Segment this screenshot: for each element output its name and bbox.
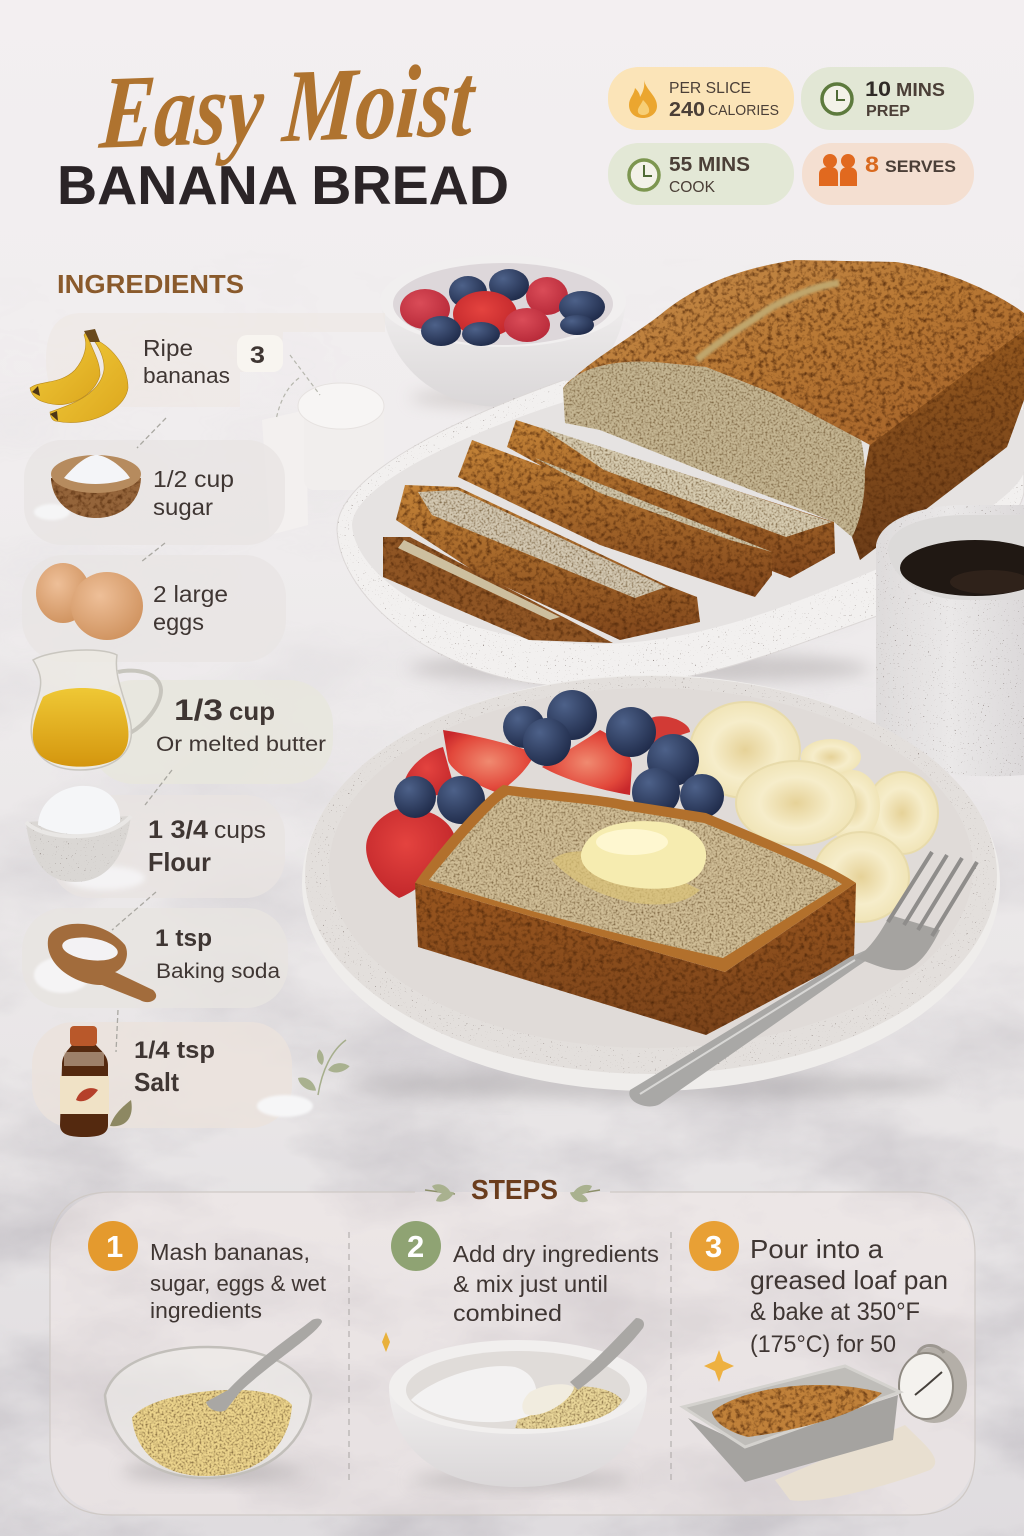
ingredient: bananas [30, 313, 385, 423]
step 2: 2 [407, 1229, 424, 1264]
ingredient: oil: 1/3 [174, 694, 223, 727]
coffee mug [876, 505, 1024, 776]
title main line: BANANA BREAD [57, 154, 509, 216]
badge: calories: 240 [669, 99, 705, 121]
ingredient: flour: 1 3/4 [148, 816, 208, 844]
step 3 [683, 1221, 967, 1501]
banana slices [690, 702, 938, 922]
ingredient: oil [31, 650, 333, 784]
slice 2 [458, 440, 772, 597]
clock [899, 1346, 967, 1423]
ingredient: baking soda: 1 tsp [155, 925, 212, 952]
stat badges [608, 67, 974, 205]
badge: cook time: COOK [669, 179, 715, 196]
step 1 [88, 1221, 326, 1482]
dashed connectors [112, 418, 172, 1052]
slice 4 [383, 537, 613, 643]
step 1: sugar, eggs & wet [150, 1271, 326, 1296]
fork [629, 852, 977, 1106]
step 1: 1 [106, 1229, 123, 1264]
badge: serves [802, 143, 974, 205]
steps heading [425, 1174, 600, 1205]
badge: prep time: MINS [896, 80, 945, 100]
steps section [50, 1174, 975, 1515]
ingredient: oil: Or melted butter [156, 733, 326, 756]
step 3: Pour into a [750, 1234, 884, 1264]
ingredients list [22, 313, 385, 1137]
background marble [0, 784, 1024, 1536]
badge: cook time [608, 143, 794, 205]
ingredient: sugar: 1/2 cup [153, 466, 234, 492]
ingredient: salt [32, 1022, 292, 1137]
berry bowl [380, 255, 626, 408]
ingredient: eggs: eggs [153, 609, 204, 635]
mixing bowl with flour [389, 1318, 647, 1489]
step 2 [382, 1221, 659, 1489]
decorative sprig and flour pile [257, 1040, 350, 1117]
bread slice [415, 785, 856, 1035]
loaf pan [683, 1366, 900, 1482]
step 2: Add dry ingredients [453, 1241, 659, 1267]
loaf [563, 260, 1024, 560]
ingredient: salt: 1/4 tsp [134, 1037, 215, 1064]
ingredient: flour: Flour [148, 847, 211, 877]
steps heading: STEPS [471, 1174, 558, 1205]
badge: serves: 8 [865, 152, 879, 177]
badge: prep time [801, 67, 974, 130]
step 2: & mix just until [453, 1271, 608, 1297]
badge: cook time: 55 MINS [669, 154, 750, 176]
butter pat [552, 821, 706, 904]
slice 3 [396, 485, 700, 640]
ingredient: eggs: 2 large [153, 581, 228, 607]
ingredient: bananas: bananas [143, 363, 230, 388]
ingredient: flour [26, 786, 285, 898]
badge: prep time: 10 [865, 78, 891, 101]
ingredient: oil: cup [229, 698, 275, 726]
ingredient: baking soda [22, 908, 288, 1008]
step 1: ingredients [150, 1298, 262, 1323]
title [57, 42, 509, 216]
step 3: 3 [705, 1229, 722, 1264]
ingredient: bananas: Ripe [143, 335, 193, 361]
ingredient: sugar [24, 440, 285, 545]
serving plate [302, 675, 1000, 1106]
berries [400, 269, 605, 346]
ingredient: salt: Salt [134, 1067, 179, 1097]
blueberries [394, 690, 724, 824]
step 1: Mash bananas, [150, 1239, 310, 1265]
parchment [775, 1425, 935, 1501]
step 3: (175°C) for 50 [750, 1331, 896, 1358]
title script line: Easy Moist [96, 42, 480, 171]
ingredients heading: INGREDIENTS [57, 269, 244, 299]
badge: calories: PER SLICE [669, 80, 751, 97]
badge: prep time: PREP [866, 103, 910, 120]
badge: calories: CALORIES [708, 103, 779, 119]
badge: serves: SERVES [885, 157, 956, 176]
serving platter with loaf [337, 260, 1024, 687]
badge: calories [608, 67, 794, 130]
step 3: greased loaf pan [750, 1265, 948, 1295]
ingredient: eggs [22, 555, 286, 662]
ingredient: flour: cups [214, 817, 266, 844]
steps panel [50, 1192, 975, 1515]
step 2: combined [453, 1300, 562, 1326]
salt shaker background [262, 355, 384, 535]
ingredient: bananas: 3 [250, 342, 265, 369]
ingredient: baking soda: Baking soda [156, 960, 280, 983]
slice 1 [507, 420, 835, 578]
strawberries [366, 716, 690, 898]
platter [337, 380, 1024, 687]
glass bowl with mash [105, 1319, 322, 1482]
platter shadow [410, 652, 870, 684]
step 3: & bake at 350°F [750, 1298, 920, 1326]
ingredient: sugar: sugar [153, 494, 213, 520]
